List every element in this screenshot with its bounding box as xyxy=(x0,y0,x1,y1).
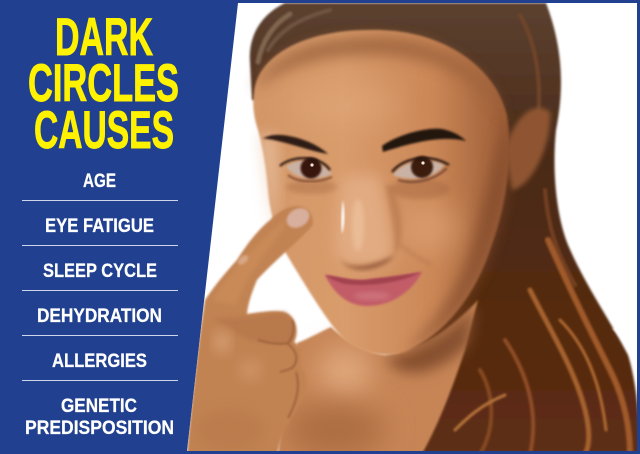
title: DARK xyxy=(55,8,153,67)
hand crease lines xyxy=(258,320,298,418)
right eyebrow xyxy=(382,129,466,152)
cause: dehydration: DEHYDRATION xyxy=(37,306,162,327)
title: CAUSES xyxy=(34,101,174,160)
hair xyxy=(250,3,640,454)
left eye xyxy=(280,158,332,181)
hair highlights xyxy=(258,10,630,454)
forehead glow xyxy=(354,96,381,114)
dark circle right xyxy=(390,179,450,199)
left eyebrow xyxy=(265,136,326,153)
cause: age: AGE xyxy=(83,171,116,192)
cause: allergies: ALLERGIES xyxy=(52,351,147,372)
hand shadow xyxy=(196,410,264,450)
cause: eye fatigue: EYE FATIGUE xyxy=(45,216,154,237)
neck and chest xyxy=(278,300,478,454)
lips xyxy=(325,272,422,306)
hand with pointing finger xyxy=(187,204,313,454)
forehead hairline shadow xyxy=(248,31,481,89)
fingernail xyxy=(286,207,310,229)
cause: sleep cycle: SLEEP CYCLE xyxy=(43,261,157,282)
hand highlight xyxy=(215,332,229,352)
thumb shadow xyxy=(213,312,295,344)
face right shadow xyxy=(410,132,510,348)
stray curl gaps at right edge xyxy=(611,327,620,339)
ear xyxy=(505,108,550,190)
nose xyxy=(336,175,402,270)
title: CIRCLES xyxy=(28,54,179,113)
knuckle xyxy=(237,254,249,266)
cheek glow xyxy=(400,202,460,254)
face xyxy=(253,30,550,355)
right eye xyxy=(392,156,449,182)
smile line xyxy=(403,247,426,262)
cause: genetic predisposition: GENETIC xyxy=(61,396,137,417)
cause: genetic predisposition xyxy=(25,396,174,439)
dark circle left xyxy=(286,180,338,194)
left face light edge xyxy=(258,135,278,235)
list of causes xyxy=(22,171,178,439)
photo white backdrop xyxy=(180,0,640,454)
cause: genetic predisposition: PREDISPOSITION xyxy=(25,418,174,439)
finger shading xyxy=(212,218,288,305)
title xyxy=(28,8,179,160)
panel: portrait photo xyxy=(180,0,640,454)
hand highlight lower xyxy=(242,362,258,378)
